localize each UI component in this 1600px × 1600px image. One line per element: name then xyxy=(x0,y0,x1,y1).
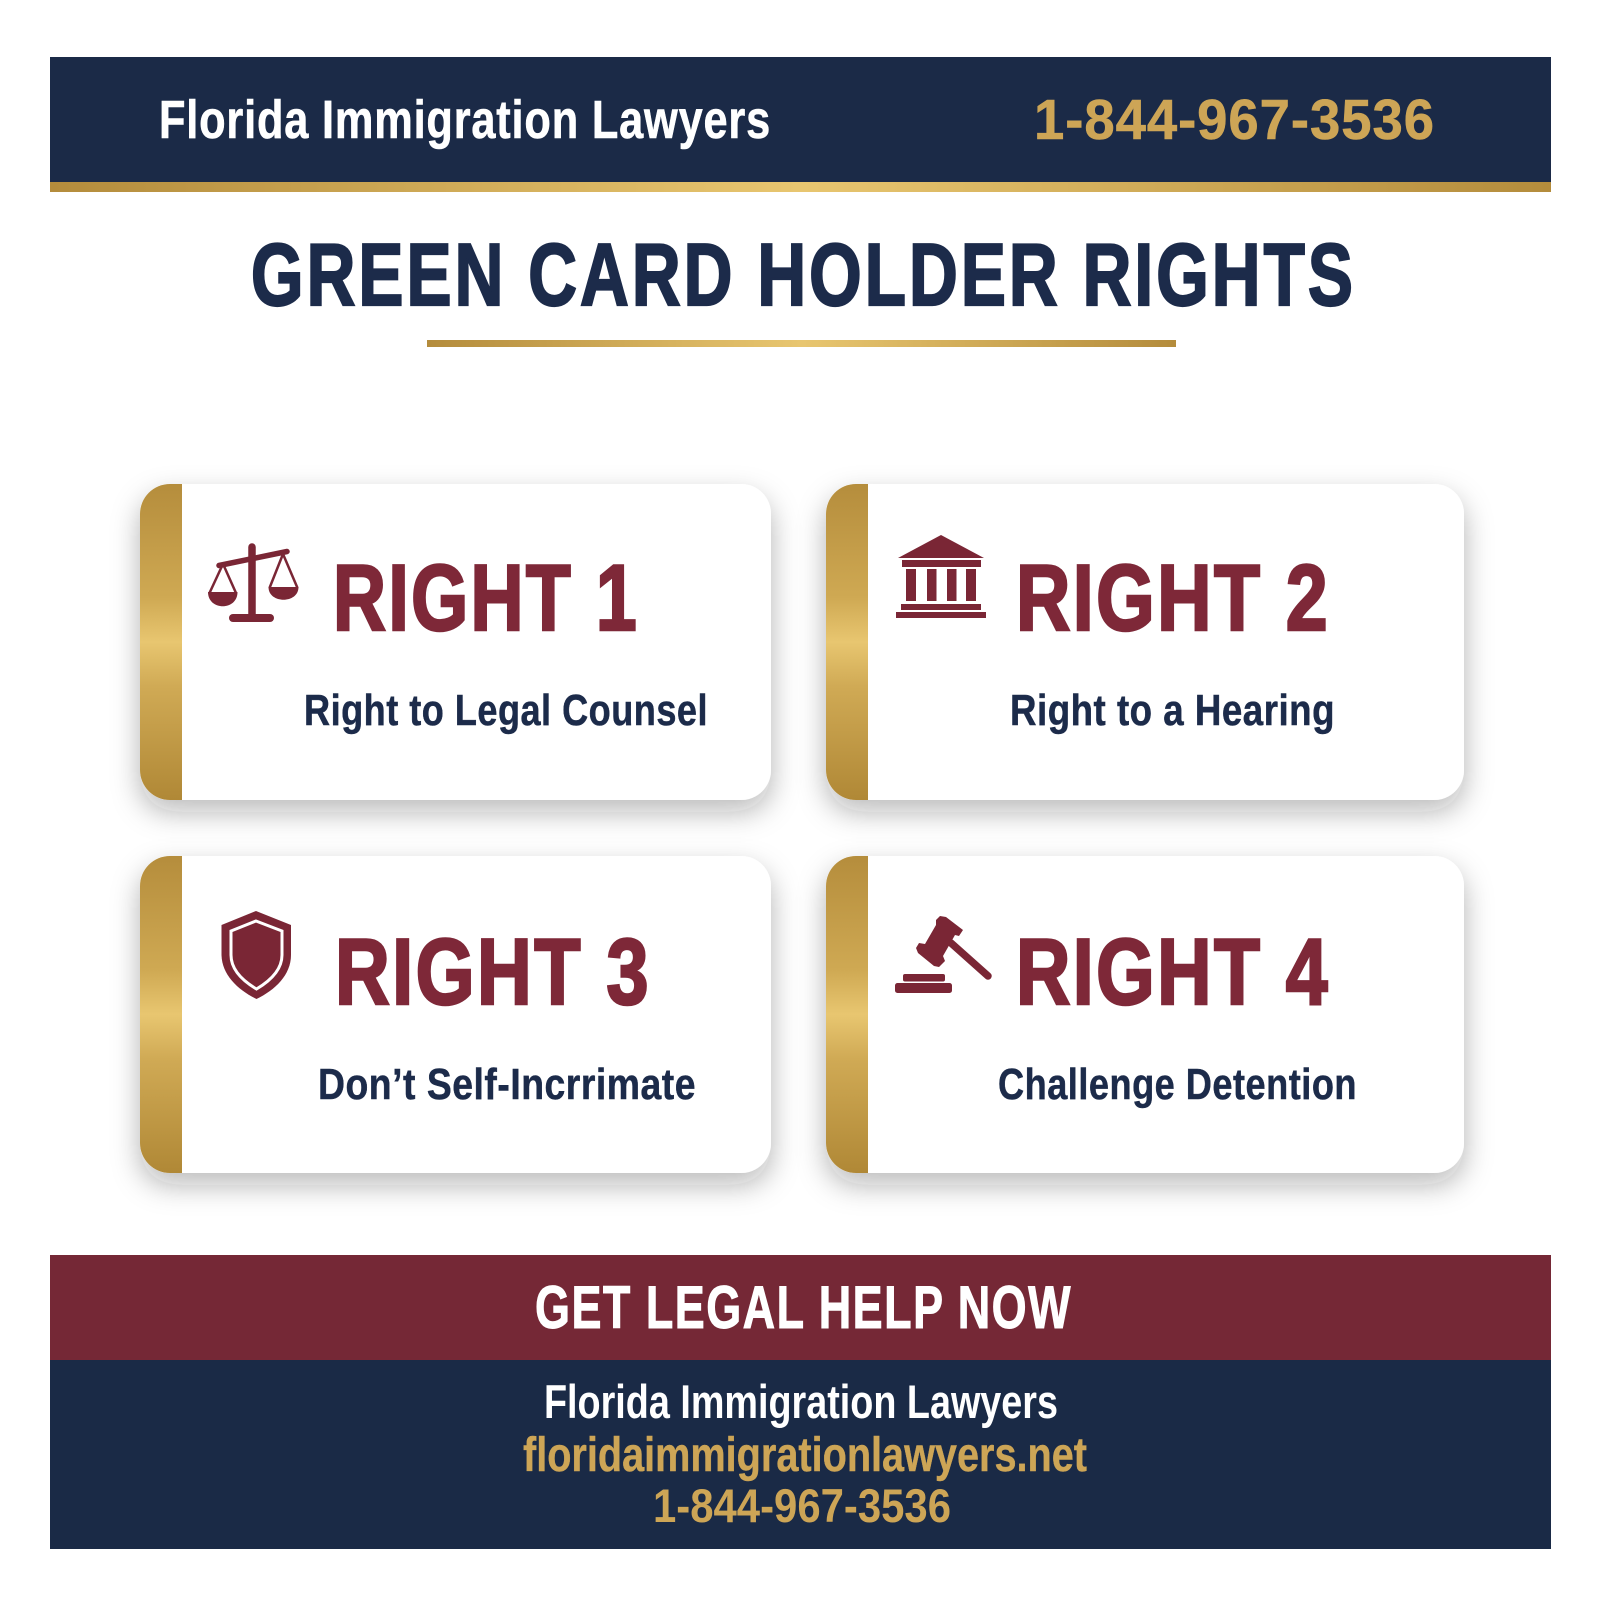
footer firm name: Florida Immigration Lawyers xyxy=(544,1375,1058,1428)
title underline xyxy=(427,340,1176,347)
icon: scales of justice xyxy=(208,547,298,622)
icon: shield xyxy=(222,911,291,999)
header phone number: 1-844-967-3536 xyxy=(1034,88,1435,152)
right 3 description: Don’t Self-Incrrimate xyxy=(318,1060,696,1109)
right 2 description: Right to a Hearing xyxy=(1010,686,1335,735)
right 1 heading: RIGHT 1 xyxy=(333,545,639,650)
call to action banner xyxy=(50,1255,1551,1360)
card: right 1 xyxy=(140,484,771,800)
icon: gavel xyxy=(895,916,988,993)
footer website: floridaimmigrationlawyers.net xyxy=(523,1429,1087,1482)
header firm name: Florida Immigration Lawyers xyxy=(159,90,771,150)
card: right 3 xyxy=(140,856,771,1173)
right 1 description: Right to Legal Counsel xyxy=(304,686,708,735)
card: right 2 xyxy=(826,484,1464,800)
footer contact panel xyxy=(50,1360,1551,1549)
card: right 4 xyxy=(826,856,1464,1173)
right 3 heading: RIGHT 3 xyxy=(335,919,651,1024)
footer phone number: 1-844-967-3536 xyxy=(653,1479,951,1532)
call to action text: GET LEGAL HELP NOW xyxy=(535,1274,1072,1341)
header bar xyxy=(50,57,1551,192)
icon: courthouse xyxy=(896,535,986,618)
right 4 description: Challenge Detention xyxy=(998,1060,1357,1109)
right 4 heading: RIGHT 4 xyxy=(1016,919,1330,1024)
right 2 heading: RIGHT 2 xyxy=(1016,545,1330,650)
